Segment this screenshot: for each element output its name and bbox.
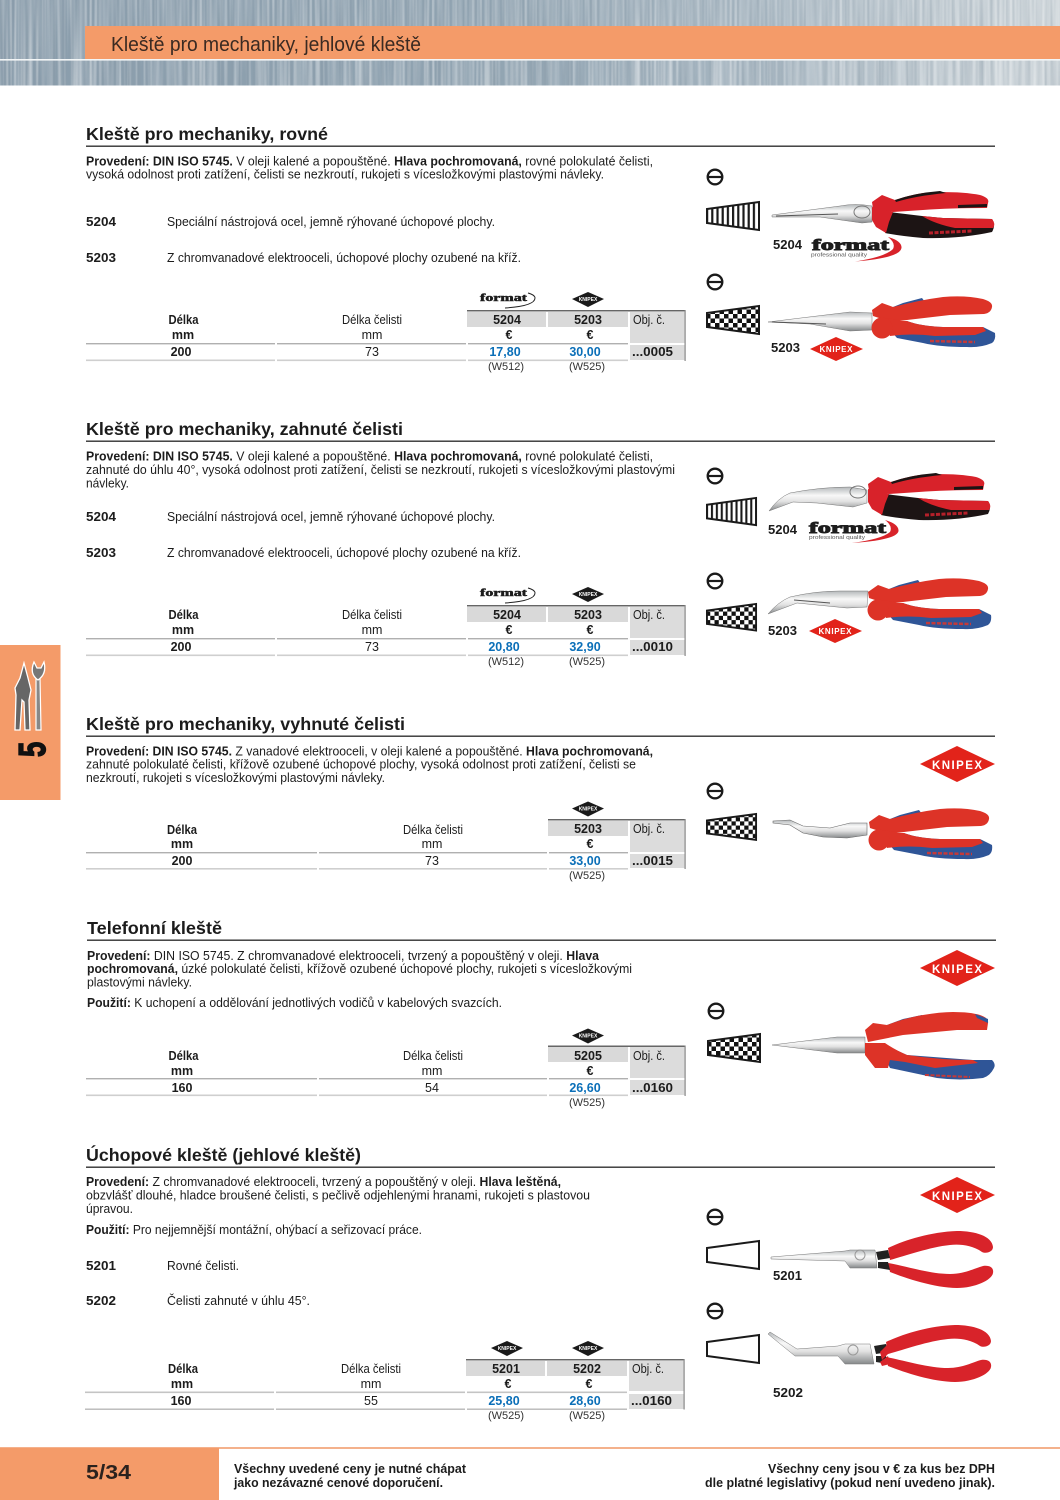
icon: checker jaw profile 5203 bbox=[707, 306, 759, 334]
price table: Délka bbox=[168, 313, 199, 327]
price table: Délka bbox=[168, 1362, 199, 1376]
footer note right: dle platné legislativy (pokud není uvedeno jinak). bbox=[705, 1476, 995, 1490]
product label 5203: 5203 bbox=[768, 623, 797, 638]
price table: € bbox=[587, 623, 594, 637]
brand logo: knipex small bbox=[572, 587, 604, 602]
brand logo: format small bbox=[480, 293, 535, 308]
chapter number: 5 bbox=[12, 742, 54, 757]
description: vysoká odolnost proti zatížení, čelisti se nezkroutí, rukojeti s vícesložkovými plastovými návleky. bbox=[86, 168, 604, 182]
brand logo: knipex small: KNIPEX bbox=[579, 297, 598, 303]
variant 5201: 5201 bbox=[86, 1259, 116, 1273]
price table: 200 bbox=[172, 854, 192, 868]
price table: € bbox=[587, 328, 594, 342]
section: needle nose gripping pliers bbox=[85, 1144, 995, 1422]
price table: (W525) bbox=[569, 1097, 605, 1109]
product: knipex offset pliers bbox=[773, 808, 992, 859]
description: zahnuté do úhlu 40°, vysoká odolnost proti zatížení, čelisti se nezkroutí, rukojeti s vícesložkovými plastovými bbox=[86, 463, 675, 477]
price table: Obj. č. bbox=[633, 313, 665, 327]
price table bbox=[85, 1359, 685, 1422]
price table: 5204 bbox=[493, 608, 521, 622]
price table: 54 bbox=[425, 1081, 439, 1095]
price table: (W525) bbox=[569, 361, 605, 373]
brand logo: knipex large bbox=[920, 1177, 995, 1213]
description: Provedení: DIN ISO 5745. V oleji kalené a popouštěné. Hlava pochromovaná, rovné polokulaté čelisti, bbox=[86, 154, 653, 168]
price table: € bbox=[586, 1377, 593, 1391]
price table: 160 bbox=[172, 1081, 192, 1095]
variant 5201: Rovné čelisti. bbox=[167, 1259, 239, 1273]
icon: slot tip 5204 bbox=[708, 469, 722, 483]
price table: 55 bbox=[364, 1394, 378, 1408]
brand logo: knipex bbox=[809, 619, 862, 643]
price table: € bbox=[506, 623, 513, 637]
price table: 25,80 bbox=[488, 1394, 520, 1408]
brand logo: knipex small bbox=[572, 292, 604, 307]
variant 5204: 5204 bbox=[86, 510, 116, 524]
brand logo: knipex: KNIPEX bbox=[818, 627, 852, 636]
product: knipex bent pliers 5203 bbox=[768, 578, 991, 629]
icon: slot tip 5202 bbox=[708, 1304, 722, 1318]
price table: Obj. č. bbox=[633, 608, 665, 622]
description bbox=[86, 744, 653, 785]
heading: Telefonní kleště bbox=[87, 918, 222, 938]
price table: 200 bbox=[171, 640, 191, 654]
brand logo: knipex small: KNIPEX bbox=[579, 592, 598, 598]
price table: mm bbox=[171, 837, 193, 851]
icon: checker jaw profile 5203 bbox=[707, 604, 756, 631]
product label 5202: 5202 bbox=[773, 1385, 803, 1400]
brand logo: knipex small bbox=[572, 1341, 604, 1356]
brand logo: knipex large: KNIPEX bbox=[932, 964, 982, 976]
price table: € bbox=[587, 837, 594, 851]
price table: 5204 bbox=[493, 313, 521, 327]
product: needle pliers 5202 bbox=[768, 1325, 991, 1382]
product label 5203: 5203 bbox=[771, 340, 800, 355]
description: pochromovaná, úzké polokulaté čelisti, křížově ozubené úchopové plochy, rukojeti s vícesložkovými bbox=[87, 962, 632, 976]
price table: € bbox=[505, 1377, 512, 1391]
product label 5204: 5204 bbox=[773, 237, 803, 252]
brand logo: knipex small: KNIPEX bbox=[498, 1346, 517, 1352]
price table: (W525) bbox=[569, 656, 605, 668]
section: offset jaw mechanic pliers bbox=[86, 714, 995, 882]
description bbox=[86, 154, 653, 182]
price table bbox=[86, 310, 686, 373]
brand logo: format small bbox=[480, 588, 535, 603]
price table: mm bbox=[362, 328, 382, 342]
price table: 5202 bbox=[573, 1362, 601, 1376]
icon: pliers and wrench bbox=[15, 662, 45, 730]
price table: 32,90 bbox=[569, 640, 601, 654]
variant 5204: Speciální nástrojová ocel, jemně rýhované úchopové plochy. bbox=[167, 215, 495, 229]
price table: 28,60 bbox=[569, 1394, 601, 1408]
price table: mm bbox=[172, 328, 194, 342]
product label 5204: 5204 bbox=[768, 522, 798, 537]
heading: Kleště pro mechaniky, vyhnuté čelisti bbox=[86, 714, 405, 734]
product: format pliers 5204 bbox=[772, 191, 994, 238]
product label 5201: 5201 bbox=[773, 1268, 802, 1283]
brand logo: knipex small bbox=[572, 1028, 604, 1044]
price table: 5203 bbox=[574, 822, 602, 836]
price table: Délka čelisti bbox=[342, 608, 402, 622]
price table: ...0010 bbox=[632, 640, 673, 654]
brand logo: knipex large: KNIPEX bbox=[932, 1191, 982, 1203]
price table: Délka bbox=[168, 1049, 199, 1063]
price table: 5201 bbox=[492, 1362, 520, 1376]
price table: Délka čelisti bbox=[403, 1049, 463, 1063]
page number: 5/34 bbox=[86, 1462, 132, 1484]
price table: mm bbox=[422, 1064, 442, 1078]
variant 5203: 5203 bbox=[86, 251, 116, 265]
brand logo: format: professional quality bbox=[809, 535, 865, 541]
brand logo: format small: format bbox=[480, 293, 528, 304]
brand logo: knipex small bbox=[491, 1341, 523, 1356]
price table: 33,00 bbox=[569, 854, 601, 868]
variant 5202: 5202 bbox=[86, 1294, 116, 1308]
usage note: Použití: K uchopení a oddělování jednotlivých vodičů v kabelových svazcích. bbox=[87, 996, 502, 1010]
price table: 30,00 bbox=[569, 345, 601, 359]
icon: slot tip 5203 bbox=[708, 574, 722, 588]
price table: Délka bbox=[167, 823, 198, 837]
description: úpravou. bbox=[86, 1202, 133, 1216]
icon: slot tip 5201 bbox=[708, 1210, 722, 1224]
price table: mm bbox=[171, 1064, 193, 1078]
variant 5204: 5204 bbox=[86, 215, 116, 229]
brand logo: knipex small bbox=[572, 802, 604, 816]
price table: mm bbox=[172, 623, 194, 637]
price table: 20,80 bbox=[488, 640, 520, 654]
price table: (W512) bbox=[488, 361, 524, 373]
description bbox=[87, 949, 632, 990]
price table: mm bbox=[362, 623, 382, 637]
price table: 26,60 bbox=[569, 1081, 601, 1095]
brand logo: format: professional quality bbox=[811, 252, 867, 258]
price table: Obj. č. bbox=[633, 1049, 665, 1063]
icon: slot tip bbox=[708, 784, 722, 798]
price table: 5203 bbox=[574, 313, 602, 327]
usage note: Použití: Pro nejjemnější montážní, ohýbací a seřizovací práce. bbox=[86, 1223, 422, 1237]
price table: 5205 bbox=[574, 1049, 602, 1063]
icon: plain jaw profile 5202 bbox=[707, 1335, 759, 1363]
price table: ...0160 bbox=[632, 1081, 673, 1095]
description: nezkroutí, rukojeti s vícesložkovými plastovými návleky. bbox=[86, 771, 385, 785]
brand logo: knipex large bbox=[920, 950, 995, 986]
description bbox=[86, 1175, 590, 1216]
icon: checker jaw profile bbox=[707, 814, 756, 840]
price table: 17,80 bbox=[489, 345, 521, 359]
variant 5203: Z chromvanadové elektrooceli, úchopové plochy ozubené na kříž. bbox=[167, 546, 521, 560]
heading: Úchopové kleště (jehlové kleště) bbox=[86, 1144, 361, 1165]
variant 5202: Čelisti zahnuté v úhlu 45°. bbox=[167, 1293, 310, 1308]
brand logo: knipex large bbox=[920, 746, 995, 782]
price table: 73 bbox=[425, 854, 439, 868]
price table: Délka čelisti bbox=[341, 1362, 401, 1376]
price table: Délka bbox=[168, 608, 199, 622]
brand logo: format bbox=[809, 520, 899, 543]
brand logo: format small: format bbox=[480, 588, 528, 599]
brand logo: knipex small: KNIPEX bbox=[579, 1346, 598, 1352]
price table bbox=[86, 1046, 686, 1109]
price table: 200 bbox=[171, 345, 191, 359]
price table: 73 bbox=[365, 640, 379, 654]
icon: slot tip 5204 bbox=[708, 170, 722, 184]
icon: striped jaw profile 5204 bbox=[707, 498, 756, 525]
header title bar: Kleště pro mechaniky, jehlové kleště bbox=[111, 34, 421, 56]
description: Provedení: Z chromvanadové elektrooceli, tvrzený a popouštěný v oleji. Hlava leštěná, bbox=[86, 1175, 561, 1189]
price table: ...0005 bbox=[632, 345, 673, 359]
description: plastovými návleky. bbox=[87, 976, 192, 990]
price table: 5203 bbox=[574, 608, 602, 622]
icon: slot tip bbox=[709, 1004, 723, 1018]
price table: (W525) bbox=[569, 870, 605, 882]
icon: striped jaw profile 5204 bbox=[707, 202, 759, 230]
price table bbox=[86, 819, 686, 882]
price table: 73 bbox=[365, 345, 379, 359]
description bbox=[86, 450, 675, 490]
brand logo: knipex large: KNIPEX bbox=[932, 760, 982, 772]
price table: mm bbox=[361, 1377, 381, 1391]
footer note right: Všechny ceny jsou v € za kus bez DPH bbox=[768, 1462, 995, 1476]
price table: mm bbox=[171, 1377, 193, 1391]
variant 5203: 5203 bbox=[86, 546, 116, 560]
variant 5201 bbox=[86, 1259, 239, 1273]
price table: € bbox=[506, 328, 513, 342]
description: Provedení: DIN ISO 5745. Z vanadové elektrooceli, v oleji kalené a popouštěné. Hlava pochromovaná, bbox=[86, 744, 653, 758]
footer note left: jako nezávazné cenové doporučení. bbox=[233, 1476, 443, 1490]
price table: Obj. č. bbox=[633, 822, 665, 836]
footer bbox=[0, 1447, 1060, 1500]
brand logo: format: format bbox=[809, 520, 887, 537]
description: návleky. bbox=[86, 476, 129, 490]
price table bbox=[86, 605, 686, 668]
price table: ...0015 bbox=[632, 854, 673, 868]
variant 5202 bbox=[86, 1293, 310, 1308]
variant 5204: Speciální nástrojová ocel, jemně rýhované úchopové plochy. bbox=[167, 510, 495, 524]
price table: ...0160 bbox=[631, 1394, 672, 1408]
brand logo: knipex small: KNIPEX bbox=[579, 1034, 598, 1040]
price table: (W512) bbox=[488, 656, 524, 668]
header title bar bbox=[85, 26, 1060, 59]
section: telephone pliers bbox=[86, 918, 996, 1109]
brand logo: format: format bbox=[812, 237, 890, 254]
icon: checker jaw profile bbox=[708, 1034, 760, 1062]
description: Provedení: DIN ISO 5745. V oleji kalené a popouštěné. Hlava pochromovaná, rovné polokulaté čelisti, bbox=[86, 450, 653, 464]
description: Provedení: DIN ISO 5745. Z chromvanadové elektrooceli, tvrzený a popouštěný v oleji. Hlava bbox=[87, 949, 600, 963]
price table: mm bbox=[422, 837, 442, 851]
footer note right bbox=[705, 1462, 995, 1490]
price table: Délka čelisti bbox=[403, 823, 463, 837]
section: straight mechanic pliers bbox=[86, 124, 995, 373]
variant 5203: Z chromvanadové elektrooceli, úchopové plochy ozubené na kříž. bbox=[167, 251, 521, 265]
footer note left: Všechny uvedené ceny je nutné chápat bbox=[234, 1462, 467, 1476]
price table: (W525) bbox=[569, 1410, 605, 1422]
product: format bent pliers 5204 bbox=[769, 473, 990, 520]
icon: plain jaw profile 5201 bbox=[707, 1241, 759, 1269]
price table: € bbox=[587, 1064, 594, 1078]
brand logo: knipex: KNIPEX bbox=[820, 345, 853, 354]
description: zahnuté polokulaté čelisti, křížově ozubené úchopové plochy, vysoká odolnost proti zatížení, čelisti se bbox=[86, 758, 636, 772]
price table: (W525) bbox=[488, 1410, 524, 1422]
section: bent jaw mechanic pliers bbox=[86, 419, 995, 668]
brand logo: knipex bbox=[810, 337, 863, 361]
chapter side tab bbox=[0, 645, 60, 800]
footer note left bbox=[233, 1462, 467, 1490]
product: needle pliers 5201 bbox=[771, 1231, 993, 1288]
price table: Délka čelisti bbox=[342, 313, 402, 327]
price table: 160 bbox=[171, 1394, 191, 1408]
header banner bbox=[0, 0, 1060, 86]
brand logo: format bbox=[811, 237, 902, 262]
heading: Kleště pro mechaniky, rovné bbox=[86, 124, 328, 144]
icon: slot tip 5203 bbox=[708, 275, 722, 289]
product: knipex telephone pliers bbox=[772, 1012, 995, 1080]
description: obzvlášť dlouhé, hladce broušené čelisti, s pečlivě odjehlenými hranami, rukojeti s plastovou bbox=[86, 1188, 590, 1202]
heading: Kleště pro mechaniky, zahnuté čelisti bbox=[86, 419, 403, 439]
brand logo: knipex small: KNIPEX bbox=[579, 806, 598, 812]
product: knipex pliers 5203 bbox=[768, 296, 995, 347]
price table: Obj. č. bbox=[632, 1362, 664, 1376]
